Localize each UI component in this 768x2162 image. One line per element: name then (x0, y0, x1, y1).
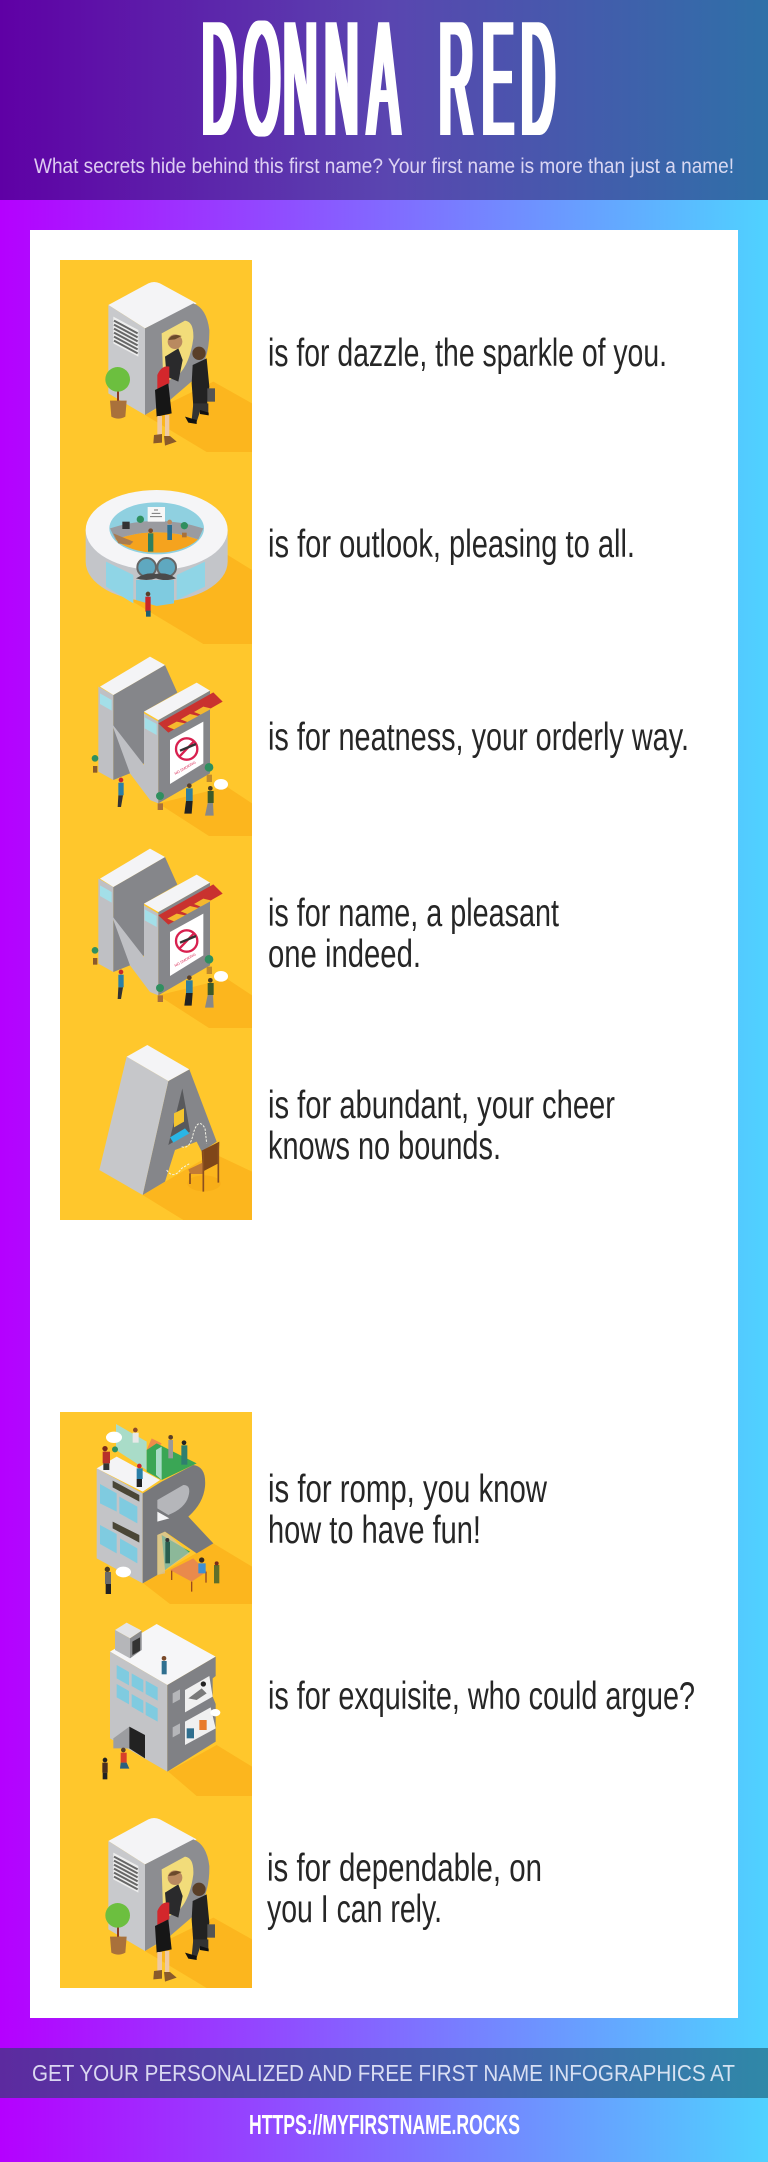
text: romp: how to have fun! (268, 1509, 481, 1552)
icon: letter R office building (60, 1412, 252, 1604)
row: A for abundant (60, 1028, 615, 1220)
text: abundant: is for abundant, your cheer (268, 1084, 615, 1127)
text: dependable: you I can rely. (267, 1888, 442, 1931)
icon: letter N building with no-smoking sign: NO SMOKING (174, 760, 197, 776)
text: abundant (268, 1084, 615, 1168)
row: E for exquisite (60, 1604, 695, 1796)
row: R for romp (60, 1412, 548, 1604)
icon: letter D building with people (60, 260, 252, 452)
text: romp: is for romp, you know (268, 1468, 548, 1511)
text: name (268, 892, 559, 976)
text: romp (268, 1468, 548, 1552)
row: O for outlook (60, 452, 635, 644)
text: dependable (267, 1847, 542, 1931)
white content panel (30, 230, 738, 2018)
footer band (0, 2048, 768, 2098)
text: name: is for name, a pleasant (268, 892, 559, 935)
row: D for dazzle (60, 260, 667, 452)
icon: letter N building with no-smoking sign: NO SMOKING (174, 952, 197, 968)
icon: letter O ring building (60, 452, 252, 644)
text: dependable: is for dependable, on (267, 1847, 542, 1890)
text: name: one indeed. (268, 933, 421, 976)
icon: letter N building with no-smoking sign (60, 644, 252, 836)
icon: letter A building with chair (60, 1028, 252, 1220)
text: outlook: is for outlook, pleasing to all. (268, 523, 635, 566)
row: D for dependable (60, 1796, 542, 1988)
icon: letter D building with people (60, 1796, 252, 1988)
header band (0, 0, 768, 200)
text: abundant: knows no bounds. (268, 1125, 501, 1168)
icon: letter N building with no-smoking sign (60, 836, 252, 1028)
footer url: HTTPS://MYFIRSTNAME.ROCKS (249, 2109, 520, 2140)
icon: letter E building with balconies (60, 1604, 252, 1796)
row: N for neatness (60, 644, 689, 837)
row: N for name (60, 836, 559, 1029)
